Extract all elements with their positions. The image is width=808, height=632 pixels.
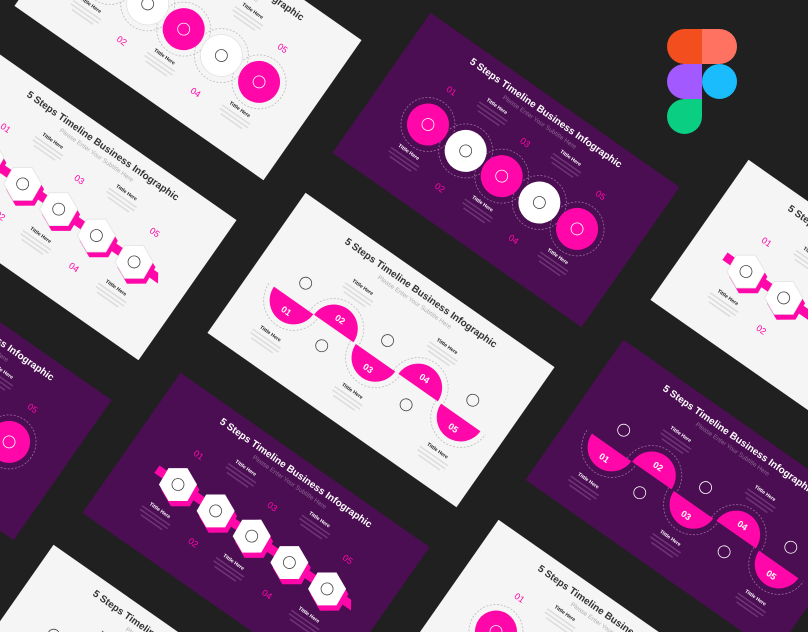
slide: purple circles (top center): Tittle Here <box>546 247 569 266</box>
slide: purple semicircles (right) <box>525 340 808 632</box>
slide: purple circles (top center): Tittle Here <box>470 195 494 214</box>
slide: white semicircles (center): Please Enter Your Subtitle Here <box>376 274 453 331</box>
slide: white hexagons (left): Tittle Here <box>104 279 128 298</box>
slide: purple hexagons (bottom): 04 <box>260 588 274 601</box>
slide: purple circles (top center): 05 <box>594 188 608 202</box>
slide: white semicircles (center): 04 <box>417 372 431 386</box>
slide: white circles (bottom right): Tittle Here <box>553 604 577 623</box>
slide: white circles (top): 05 <box>276 41 290 55</box>
slide: purple semicircles (right): Tittle Here <box>576 472 600 491</box>
slide: white hexagons (left): Tittle Here <box>115 183 138 202</box>
slide: purple semicircles (right): Tittle Here <box>744 589 767 608</box>
slide: purple semicircles (right): Please Enter Your Subtitle Here <box>694 421 771 478</box>
slide: purple semicircles (right): 05 <box>764 568 778 582</box>
slide: purple circles (top center): Tittle Here <box>485 97 509 116</box>
slide: purple semicircles (right): Tittle Here <box>658 529 682 548</box>
slide: purple circles (far left): 05 <box>26 401 40 415</box>
slide: white circles (bottom right): 01 <box>513 591 526 605</box>
slide: white circles (top): Tittle Here <box>228 100 251 119</box>
slide: purple hexagons (bottom): Tittle Here <box>222 553 245 572</box>
slide: purple circles (top center): 5 Steps Timeline Business Infographic <box>467 56 624 171</box>
slide: purple circles (top center): Tittle Here <box>559 149 582 168</box>
slide: purple hexagons (bottom): Tittle Here <box>297 606 321 625</box>
slide: white semicircles (center) <box>207 193 555 507</box>
slide: white semicircles (center): Tittle Here <box>258 325 282 344</box>
slide: purple hexagons (bottom): Tittle Here <box>308 510 331 529</box>
slide: purple circles (top center): 03 <box>518 136 532 150</box>
slide: white hexagons (left): Tittle Here <box>29 226 52 245</box>
slide: white circles (top) <box>14 0 362 180</box>
slide: white semicircles (center): 03 <box>361 361 375 375</box>
slide: purple hexagons (bottom): 01 <box>192 448 206 462</box>
slide: purple circles (top center) <box>332 13 680 327</box>
slide: white hexagons (left): 04 <box>67 261 81 274</box>
slide: purple hexagons (bottom): Please Enter Your Subtitle Here <box>251 454 328 511</box>
slide: white hexagons (right) <box>650 160 808 474</box>
slide: white hexagons (right): 01 <box>760 235 774 249</box>
slide: white hexagons (left): Tittle Here <box>41 132 64 151</box>
slide: white semicircles (center): 5 Steps Timeline Business Infographic <box>342 236 499 351</box>
slide: purple hexagons (bottom): Tittle Here <box>234 459 257 478</box>
slide: white semicircles (center): 01 <box>279 304 293 318</box>
slide: white hexagons (left): 5 Steps Timeline Business Infographic <box>24 89 181 204</box>
slide: purple semicircles (right): 03 <box>679 508 693 522</box>
slide: white hexagons (left): Please Enter Your Subtitle Here <box>58 127 135 184</box>
slide: purple semicircles (right): Tittle Here <box>753 484 777 503</box>
slide: white circles (top): 02 <box>115 34 129 48</box>
slide: purple hexagons (bottom): 03 <box>265 500 279 514</box>
slide: white semicircles (center): Tittle Here <box>351 278 374 297</box>
slide: white semicircles (center): Tittle Here <box>435 337 459 356</box>
slide: white semicircles (center): Tittle Here <box>426 442 449 461</box>
slide: white circles (top): Tittle Here <box>152 48 176 67</box>
slide: purple semicircles (right): Tittle Here <box>669 425 692 444</box>
slide: purple circles (top center): 02 <box>433 181 447 195</box>
slide: purple semicircles (right): 04 <box>735 519 749 533</box>
slide: white semicircles (center): Tittle Here <box>340 382 364 401</box>
slide: white semicircles (bottom left) <box>0 545 303 632</box>
slide: purple circles (far left) <box>0 226 112 540</box>
slide: white hexagons (left): 03 <box>72 173 86 187</box>
slide: white semicircles (center): 05 <box>446 421 460 435</box>
slide: purple circles (top center): 04 <box>507 232 521 246</box>
slide: white circles (top): 04 <box>189 85 203 99</box>
slide: white hexagons (left): 05 <box>148 225 162 239</box>
slide: purple circles (top center): 01 <box>445 84 458 98</box>
slide: white hexagons (right): Tittle Here <box>716 288 739 307</box>
slide: white circles (bottom right) <box>400 520 748 632</box>
slide: white hexagons (left) <box>0 46 237 360</box>
slide: white semicircles (center): 02 <box>333 313 347 326</box>
slide: purple hexagons (bottom): 05 <box>341 552 355 566</box>
slide: purple hexagons (bottom) <box>82 373 430 632</box>
slide: purple semicircles (right): 02 <box>651 460 665 473</box>
slide: white hexagons (right): 02 <box>754 323 768 337</box>
icon: figma logo <box>667 29 737 134</box>
slide: purple hexagons (bottom): 02 <box>186 536 200 550</box>
slide: purple hexagons (bottom): Tittle Here <box>148 501 171 520</box>
slide: purple circles (top center): Tittle Here <box>397 143 420 162</box>
slide: purple semicircles (right): 01 <box>597 451 611 465</box>
slide: white circles (top): Tittle Here <box>241 2 264 21</box>
slide: purple hexagons (bottom): 5 Steps Timeline Business Infographic <box>217 416 374 531</box>
slide: purple circles (top center): Please Enter Your Subtitle Here <box>501 94 578 151</box>
